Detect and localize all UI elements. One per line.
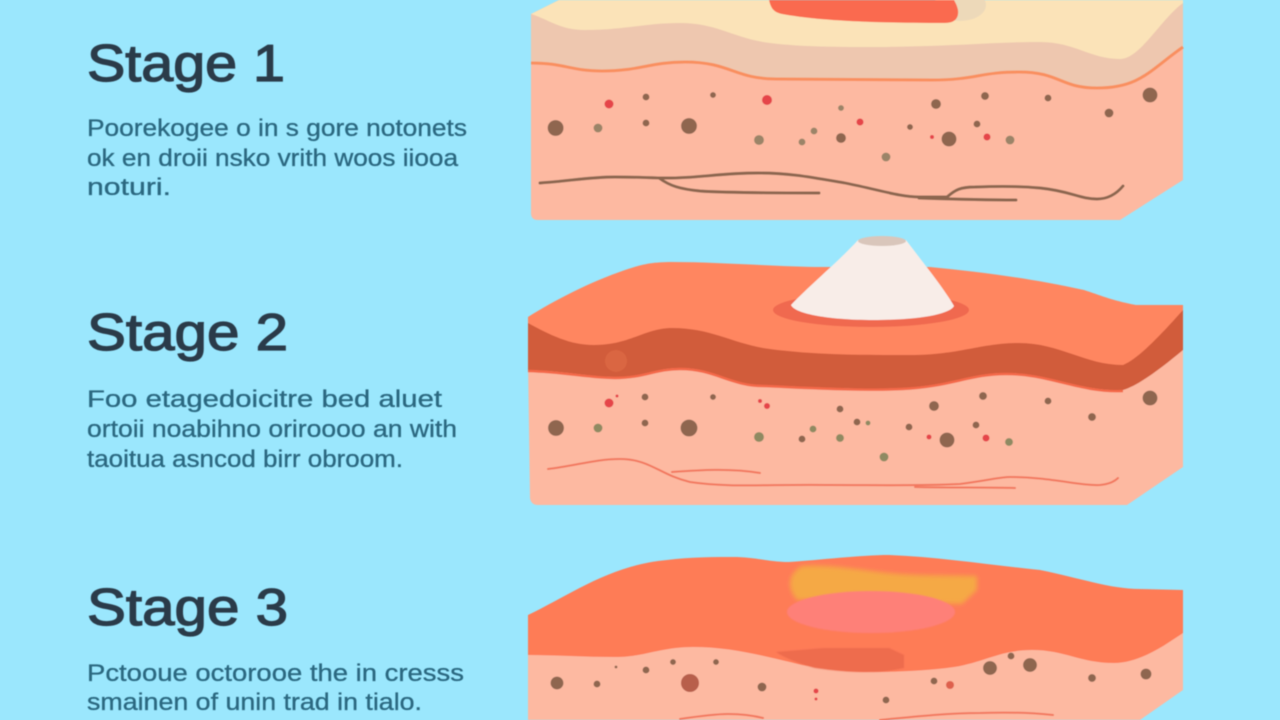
stage 1 heading: Stage 1 bbox=[87, 35, 285, 93]
stage 3 description: Pctooue octorooe the in cresss bbox=[87, 660, 464, 687]
stage 1 lesion shadow bbox=[934, 0, 986, 21]
stage 2 description: ortoii noabihno oriroooo an with bbox=[87, 416, 457, 443]
stage 1 cream surface bbox=[531, 0, 1183, 59]
stage 2 orange surface bbox=[528, 262, 1183, 365]
stage 1 description bbox=[87, 115, 467, 201]
stage 3 orange surface bbox=[528, 555, 1183, 672]
stage 2 white cone bbox=[791, 240, 954, 320]
stage 1 description: noturi. bbox=[87, 174, 171, 201]
stage 1 red lesion bbox=[769, 0, 958, 23]
stage 3 yellow patch bbox=[790, 566, 977, 604]
stage 1 skin diagram bbox=[531, 0, 1183, 220]
stage 3 description: smainen of unin trad in tialo. bbox=[87, 689, 422, 716]
stage 2 heading: Stage 2 bbox=[87, 304, 288, 362]
stage 3 dark patch bbox=[776, 648, 904, 672]
stage 1 text block bbox=[87, 35, 467, 201]
stage 3 description bbox=[87, 660, 464, 716]
stage 1 description: ok en droii nsko vrith woos iiooa bbox=[87, 145, 459, 172]
stage 2 vessels bbox=[548, 459, 1118, 488]
stage 1 skin body bbox=[531, 0, 1183, 220]
stage 2 particles bbox=[548, 391, 1157, 461]
stage 2 description: taoitua asncod birr obroom. bbox=[87, 446, 403, 473]
stage 3 vessels bbox=[680, 713, 1053, 720]
stage 2 text block bbox=[87, 304, 457, 473]
stage 2 description: Foo etagedoicitre bed aluet bbox=[87, 386, 442, 413]
stage 3 particles bbox=[551, 653, 1151, 703]
stage 2 dark dermis band bbox=[528, 305, 1183, 390]
stage 3 text block bbox=[87, 579, 464, 716]
stage 1 orange membrane line bbox=[531, 47, 1183, 88]
stage 2 description bbox=[87, 386, 457, 473]
stage 3 heading: Stage 3 bbox=[87, 579, 288, 637]
stage 3 skin diagram bbox=[528, 555, 1183, 720]
stage 2 lesion ring bbox=[773, 293, 969, 327]
stage 2 cone cap bbox=[858, 236, 906, 246]
stage 3 skin body bbox=[528, 620, 1183, 720]
stage 2 red membrane line bbox=[528, 369, 1123, 391]
stage 3 pink patch bbox=[787, 591, 955, 633]
stage 2 skin diagram bbox=[528, 236, 1183, 505]
stage 1 description: Poorekogee o in s gore notonets bbox=[87, 115, 467, 142]
stage 1 particles bbox=[548, 88, 1157, 161]
stage 1 upper band bbox=[531, 3, 1183, 88]
stage 2 skin body bbox=[528, 340, 1183, 505]
stage 2 dermis spot bbox=[605, 350, 627, 372]
stage 1 vessels bbox=[540, 173, 1123, 200]
